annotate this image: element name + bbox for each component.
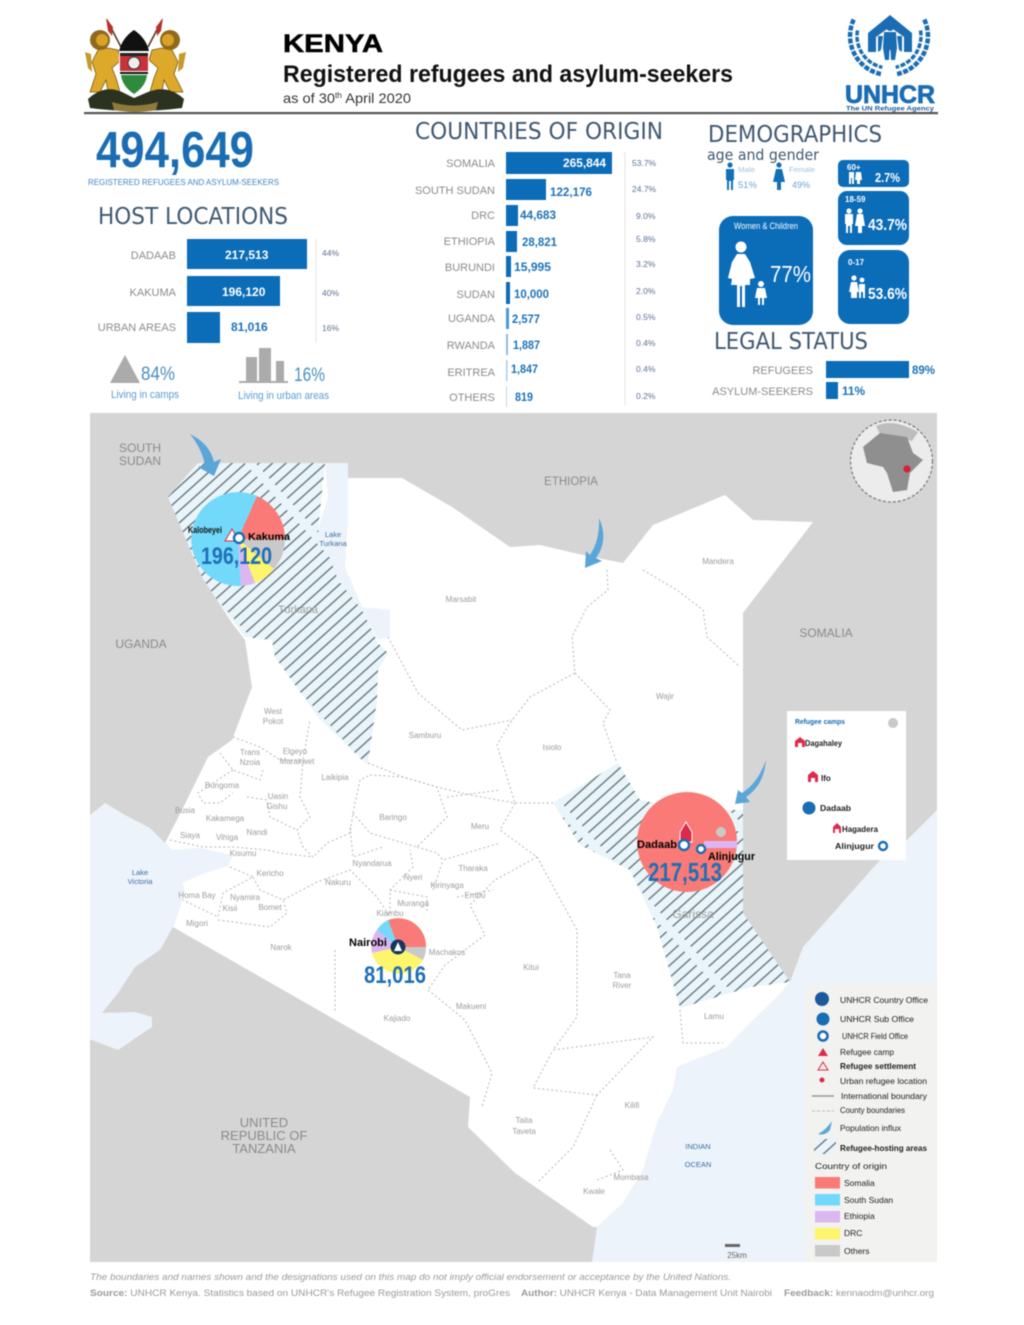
county labels: Kisii [223, 904, 238, 913]
panel: countries of origin: 10,000 [514, 287, 549, 301]
stat: living in urban areas [238, 348, 329, 402]
county labels: Nyeri [404, 873, 423, 882]
title: April 2020 [342, 90, 411, 106]
legend: country of origin: Ethiopia [844, 1211, 875, 1221]
title: KENYA [283, 30, 383, 58]
country labels: SOMALIA [799, 626, 853, 640]
county labels: Tharaka [458, 864, 488, 873]
inset: refugee camps: Alinjugur [835, 842, 874, 851]
panel: host locations: 81,016 [231, 320, 268, 334]
panel: countries of origin: 265,844 [563, 156, 606, 170]
legend: country of origin: Somalia [844, 1178, 875, 1188]
lake labels [128, 530, 711, 1169]
icon: male share: 51% [738, 180, 757, 190]
icon: female share [773, 162, 815, 190]
legend: country of origin: DRC [844, 1228, 862, 1238]
footer: sources: Author: UNHCR Kenya - Data Management Unit Nairobi [521, 1288, 772, 1299]
county labels: Nyamira [230, 893, 260, 902]
inset: refugee camps [787, 711, 906, 860]
county labels: Tana [613, 971, 631, 980]
card: age 18-59 [838, 191, 909, 245]
county labels: Bomet [258, 903, 282, 912]
panel: host locations: 217,513 [225, 248, 269, 262]
county labels: Taveta [512, 1127, 536, 1136]
county labels: Trans [240, 748, 260, 757]
country labels: TANZANIA [232, 1141, 296, 1156]
scale bar: 25km [727, 1251, 747, 1260]
legend: lines and areas: County boundaries [840, 1105, 905, 1115]
title: th [335, 91, 342, 100]
map labels [115, 441, 853, 1196]
panel: countries of origin: DRC [471, 210, 495, 222]
county labels: Turkana [278, 604, 319, 616]
panel: countries of origin: 0.2% [636, 391, 656, 401]
county labels: Homa Bay [178, 891, 216, 900]
county labels: Kericho [256, 869, 284, 878]
card: age 18-59: 43.7% [868, 217, 907, 234]
lake: Winam Gulf [170, 848, 233, 885]
country labels: SUDAN [119, 454, 161, 468]
panel: demographics [707, 122, 909, 325]
panel: legal status: REFUGEES [752, 365, 813, 377]
panel: demographics: DEMOGRAPHICS [708, 122, 882, 148]
map legend [805, 985, 937, 1262]
county labels: Nyandarua [352, 859, 392, 868]
card: age 0-17 [838, 250, 909, 324]
panel: countries of origin: 1,887 [513, 338, 540, 352]
panel: countries of origin: 0.4% [636, 364, 656, 374]
county labels: Kisumu [230, 849, 256, 858]
arrow: Somalia inflow [735, 760, 766, 804]
panel: countries of origin: OTHERS [449, 392, 495, 404]
panel: legal status: ASYLUM-SEEKERS [712, 386, 813, 398]
pie chart: Nairobi [349, 918, 426, 989]
logo: UNHCR: UNHCR [845, 81, 935, 109]
panel: host locations [98, 204, 339, 343]
panel: countries of origin: 3.2% [636, 259, 656, 269]
map background: neighbouring countries [90, 413, 937, 1262]
panel: countries of origin: ERITREA [447, 367, 496, 379]
county labels: Wajir [656, 692, 674, 701]
country labels: UGANDA [115, 637, 167, 651]
legend: offices and camps: UNHCR Field Office [842, 1031, 908, 1041]
stat: living in urban areas: Living in urban areas [238, 390, 329, 402]
panel: countries of origin: UGANDA [448, 313, 496, 325]
legend: lines and areas: International boundary [841, 1091, 928, 1101]
county labels: Pokot [263, 717, 284, 726]
panel: host locations: URBAN AREAS [98, 322, 176, 334]
pie chart: Kakuma: 196,120 [201, 543, 272, 570]
refugee-hosting area: Turkana [168, 463, 388, 763]
panel: countries of origin: 1,847 [511, 362, 538, 376]
county labels: Makueni [456, 1002, 486, 1011]
inset: refugee camps: Hagadera [842, 825, 879, 834]
county labels [175, 557, 734, 1196]
panel: countries of origin: SOMALIA [446, 158, 496, 170]
county labels: Marsabit [446, 595, 477, 604]
panel: countries of origin: 53.7% [632, 158, 657, 168]
pie chart: Dadaab: Alinjugur [708, 851, 756, 863]
footer: sources: Feedback: kennaodm@unhcr.org [784, 1288, 934, 1299]
panel: countries of origin: 24.7% [632, 184, 657, 194]
legend: country of origin: Others [844, 1246, 870, 1256]
panel: host locations: HOST LOCATIONS [98, 204, 288, 230]
county labels: Isiolo [543, 743, 562, 752]
panel: countries of origin: 0.5% [636, 312, 656, 322]
arrow: Ethiopia inflow [585, 518, 603, 568]
title [283, 30, 733, 106]
panel: countries of origin: 2,577 [512, 312, 540, 326]
icon: female share: Female [789, 167, 815, 174]
county labels: Uasin [268, 792, 288, 801]
legend: country of origin [815, 1161, 893, 1256]
county labels: Marakwet [280, 757, 315, 766]
county labels: Kilifi [625, 1101, 640, 1110]
card: age 0-17: 0-17 [848, 258, 865, 267]
panel: demographics: age and gender [707, 146, 820, 164]
inset: refugee camps: Dagahaley [805, 739, 842, 748]
county labels: Narok [270, 943, 293, 952]
card: women and children [719, 216, 813, 325]
pie chart: Kakuma: Kalobeyei [188, 525, 222, 535]
panel: countries of origin: 122,176 [550, 185, 592, 199]
pie chart: Nairobi: 81,016 [364, 962, 426, 989]
county labels: Migori [186, 919, 208, 928]
card: age 18-59: 18-59 [845, 195, 866, 204]
panel: countries of origin: 9.0% [636, 211, 656, 221]
panel: countries of origin: ETHIOPIA [444, 236, 496, 248]
country labels: SOUTH [119, 441, 161, 455]
legend: offices and camps: UNHCR Country Office [840, 995, 928, 1005]
panel: host locations: 16% [322, 323, 339, 333]
panel: countries of origin: 0.4% [636, 338, 656, 348]
card: age 0-17: 53.6% [868, 286, 907, 303]
inset: refugee camps: Dadaab [820, 804, 851, 813]
county labels: Elgeyo [283, 747, 308, 756]
county boundaries [170, 570, 740, 1183]
county labels: Kirinyaga [430, 881, 464, 890]
country labels: ETHIOPIA [544, 476, 598, 488]
county labels: Nakuru [325, 878, 351, 887]
country labels: REPUBLIC OF [221, 1128, 307, 1143]
county labels: River [613, 981, 632, 990]
lake: Turkana [318, 463, 390, 640]
panel: countries of origin: BURUNDI [445, 262, 495, 274]
stat: living in camps: Living in camps [111, 389, 179, 401]
country labels [115, 441, 853, 1156]
total figure: REGISTERED REFUGEES AND ASYLUM-SEEKERS [88, 178, 279, 187]
county labels: Lamu [704, 1012, 724, 1021]
panel: legal status: 11% [842, 384, 865, 398]
lake labels: Turkana [319, 539, 347, 548]
icon: male share [726, 162, 757, 190]
county labels: Kiambu [376, 909, 404, 918]
county labels: Bungoma [205, 781, 240, 790]
county labels: Laikipia [321, 773, 349, 782]
scale bar [725, 1244, 747, 1260]
card: age 60+ [838, 160, 909, 187]
legend: country of origin: Country of origin [815, 1161, 887, 1171]
footer: sources [90, 1288, 934, 1299]
lake labels: INDIAN [685, 1142, 711, 1151]
country labels: UNITED [240, 1115, 288, 1130]
country: Kenya [165, 463, 813, 1227]
panel: countries of origin: 819 [515, 390, 533, 404]
footer: disclaimer: The boundaries and names shown and the designations used on this map do not imply official endorsement or acceptance by the United Nations. [90, 1272, 731, 1283]
panel: countries of origin: 5.8% [636, 234, 656, 244]
lake labels: Lake [325, 530, 341, 539]
county labels: Machakos [429, 948, 465, 957]
globe inset [850, 420, 932, 502]
lake: Victoria [90, 803, 185, 1050]
stat: living in camps: 84% [141, 364, 175, 385]
county labels: Baringo [379, 813, 407, 822]
card: women and children: Women & Children [734, 221, 798, 231]
county labels: West [264, 707, 283, 716]
lake labels: OCEAN [685, 1160, 711, 1169]
panel: countries of origin: 2.0% [636, 286, 656, 296]
icon: female share: 49% [792, 180, 810, 190]
panel: host locations: KAKUMA [130, 287, 177, 299]
panel: countries of origin [415, 119, 663, 407]
legend: offices and camps: Urban refugee location [840, 1076, 927, 1086]
title: Registered refugees and asylum-seekers [283, 61, 733, 88]
lake labels: Lake [132, 868, 148, 877]
stat: living in camps [110, 355, 179, 401]
panel: countries of origin: RWANDA [447, 340, 496, 352]
county labels: Kajiado [384, 1014, 411, 1023]
logo: UNHCR: The UN Refugee Agency [846, 106, 934, 112]
panel: legal status: 89% [912, 363, 935, 377]
panel: host locations: 196,120 [222, 285, 266, 299]
map of Kenya [90, 413, 937, 1262]
county labels: Garissa [672, 907, 714, 921]
county labels: Gishu [267, 802, 287, 811]
county labels: Nandi [247, 828, 268, 837]
legend: offices and camps [815, 992, 928, 1086]
total figure: 494,649 [96, 121, 254, 178]
panel: countries of origin: 44,683 [520, 208, 556, 222]
legend: country of origin: South Sudan [844, 1195, 893, 1205]
emblem: Kenya coat of arms [85, 18, 186, 112]
panel: countries of origin: 28,821 [522, 235, 557, 249]
county labels: Meru [471, 822, 489, 831]
inset: refugee camps: Refugee camps [795, 717, 845, 726]
panel: countries of origin: 15,995 [514, 260, 551, 274]
inset: refugee camps: Ifo [821, 774, 831, 783]
county labels: Siaya [180, 831, 201, 840]
panel: countries of origin: COUNTRIES OF ORIGIN [415, 119, 663, 145]
pie chart: Dadaab: Dadaab [637, 839, 677, 851]
card: age 60+: 60+ [847, 163, 861, 172]
county labels: Muranga [397, 899, 429, 908]
panel: host locations: 40% [322, 288, 339, 298]
panel: countries of origin: SUDAN [456, 289, 495, 301]
pie chart: Dadaab: 217,513 [648, 857, 722, 887]
legend: lines and areas: Refugee-hosting areas [840, 1143, 927, 1153]
legend: lines and areas [812, 1091, 928, 1154]
county labels: Nzoia [240, 758, 261, 767]
county labels: Embu [465, 891, 485, 900]
pie chart: Dadaab [637, 792, 756, 892]
panel: legal status [712, 329, 935, 399]
county labels: Vihiga [216, 833, 239, 842]
refugee-hosting area: Garissa [553, 763, 790, 1008]
header rule [84, 112, 938, 114]
legend: offices and camps: Refugee settlement [840, 1061, 916, 1071]
footer: sources: Source: UNHCR Kenya. Statistics based on UNHCR's Refugee Registration System, proGres [90, 1288, 510, 1299]
stat: living in urban areas: 16% [294, 365, 325, 386]
panel: countries of origin: SOUTH SUDAN [415, 185, 495, 197]
card: age 60+: 2.7% [875, 170, 900, 185]
arrow: South Sudan inflow [190, 434, 221, 476]
lake labels: Victoria [128, 877, 153, 886]
sea: Indian Ocean [592, 810, 937, 1262]
county labels: Taita [516, 1116, 533, 1125]
county labels: Kitui [523, 963, 539, 972]
legend: lines and areas: Population influx [840, 1123, 902, 1133]
county labels: Kwale [583, 1187, 605, 1196]
county labels: Samburu [409, 731, 441, 740]
pie chart: Kakuma [188, 492, 290, 586]
panel: host locations: 44% [322, 248, 339, 258]
county labels: Mandera [702, 557, 734, 566]
icon: male share: Male [738, 167, 755, 174]
title: as of 30 [283, 90, 333, 106]
legend: offices and camps: Refugee camp [840, 1047, 894, 1057]
pie chart: Nairobi: Nairobi [349, 937, 387, 949]
card: women and children: 77% [770, 261, 811, 287]
pie chart: Kakuma: Kakuma [248, 532, 290, 543]
legend: offices and camps: UNHCR Sub Office [840, 1014, 914, 1024]
county labels: Busia [175, 806, 196, 815]
county labels: Kakamega [206, 814, 245, 823]
panel: host locations: DADAAB [131, 250, 176, 262]
county labels: Mombasa [613, 1173, 649, 1182]
logo: UNHCR [845, 15, 935, 112]
panel: legal status: LEGAL STATUS [714, 329, 868, 355]
